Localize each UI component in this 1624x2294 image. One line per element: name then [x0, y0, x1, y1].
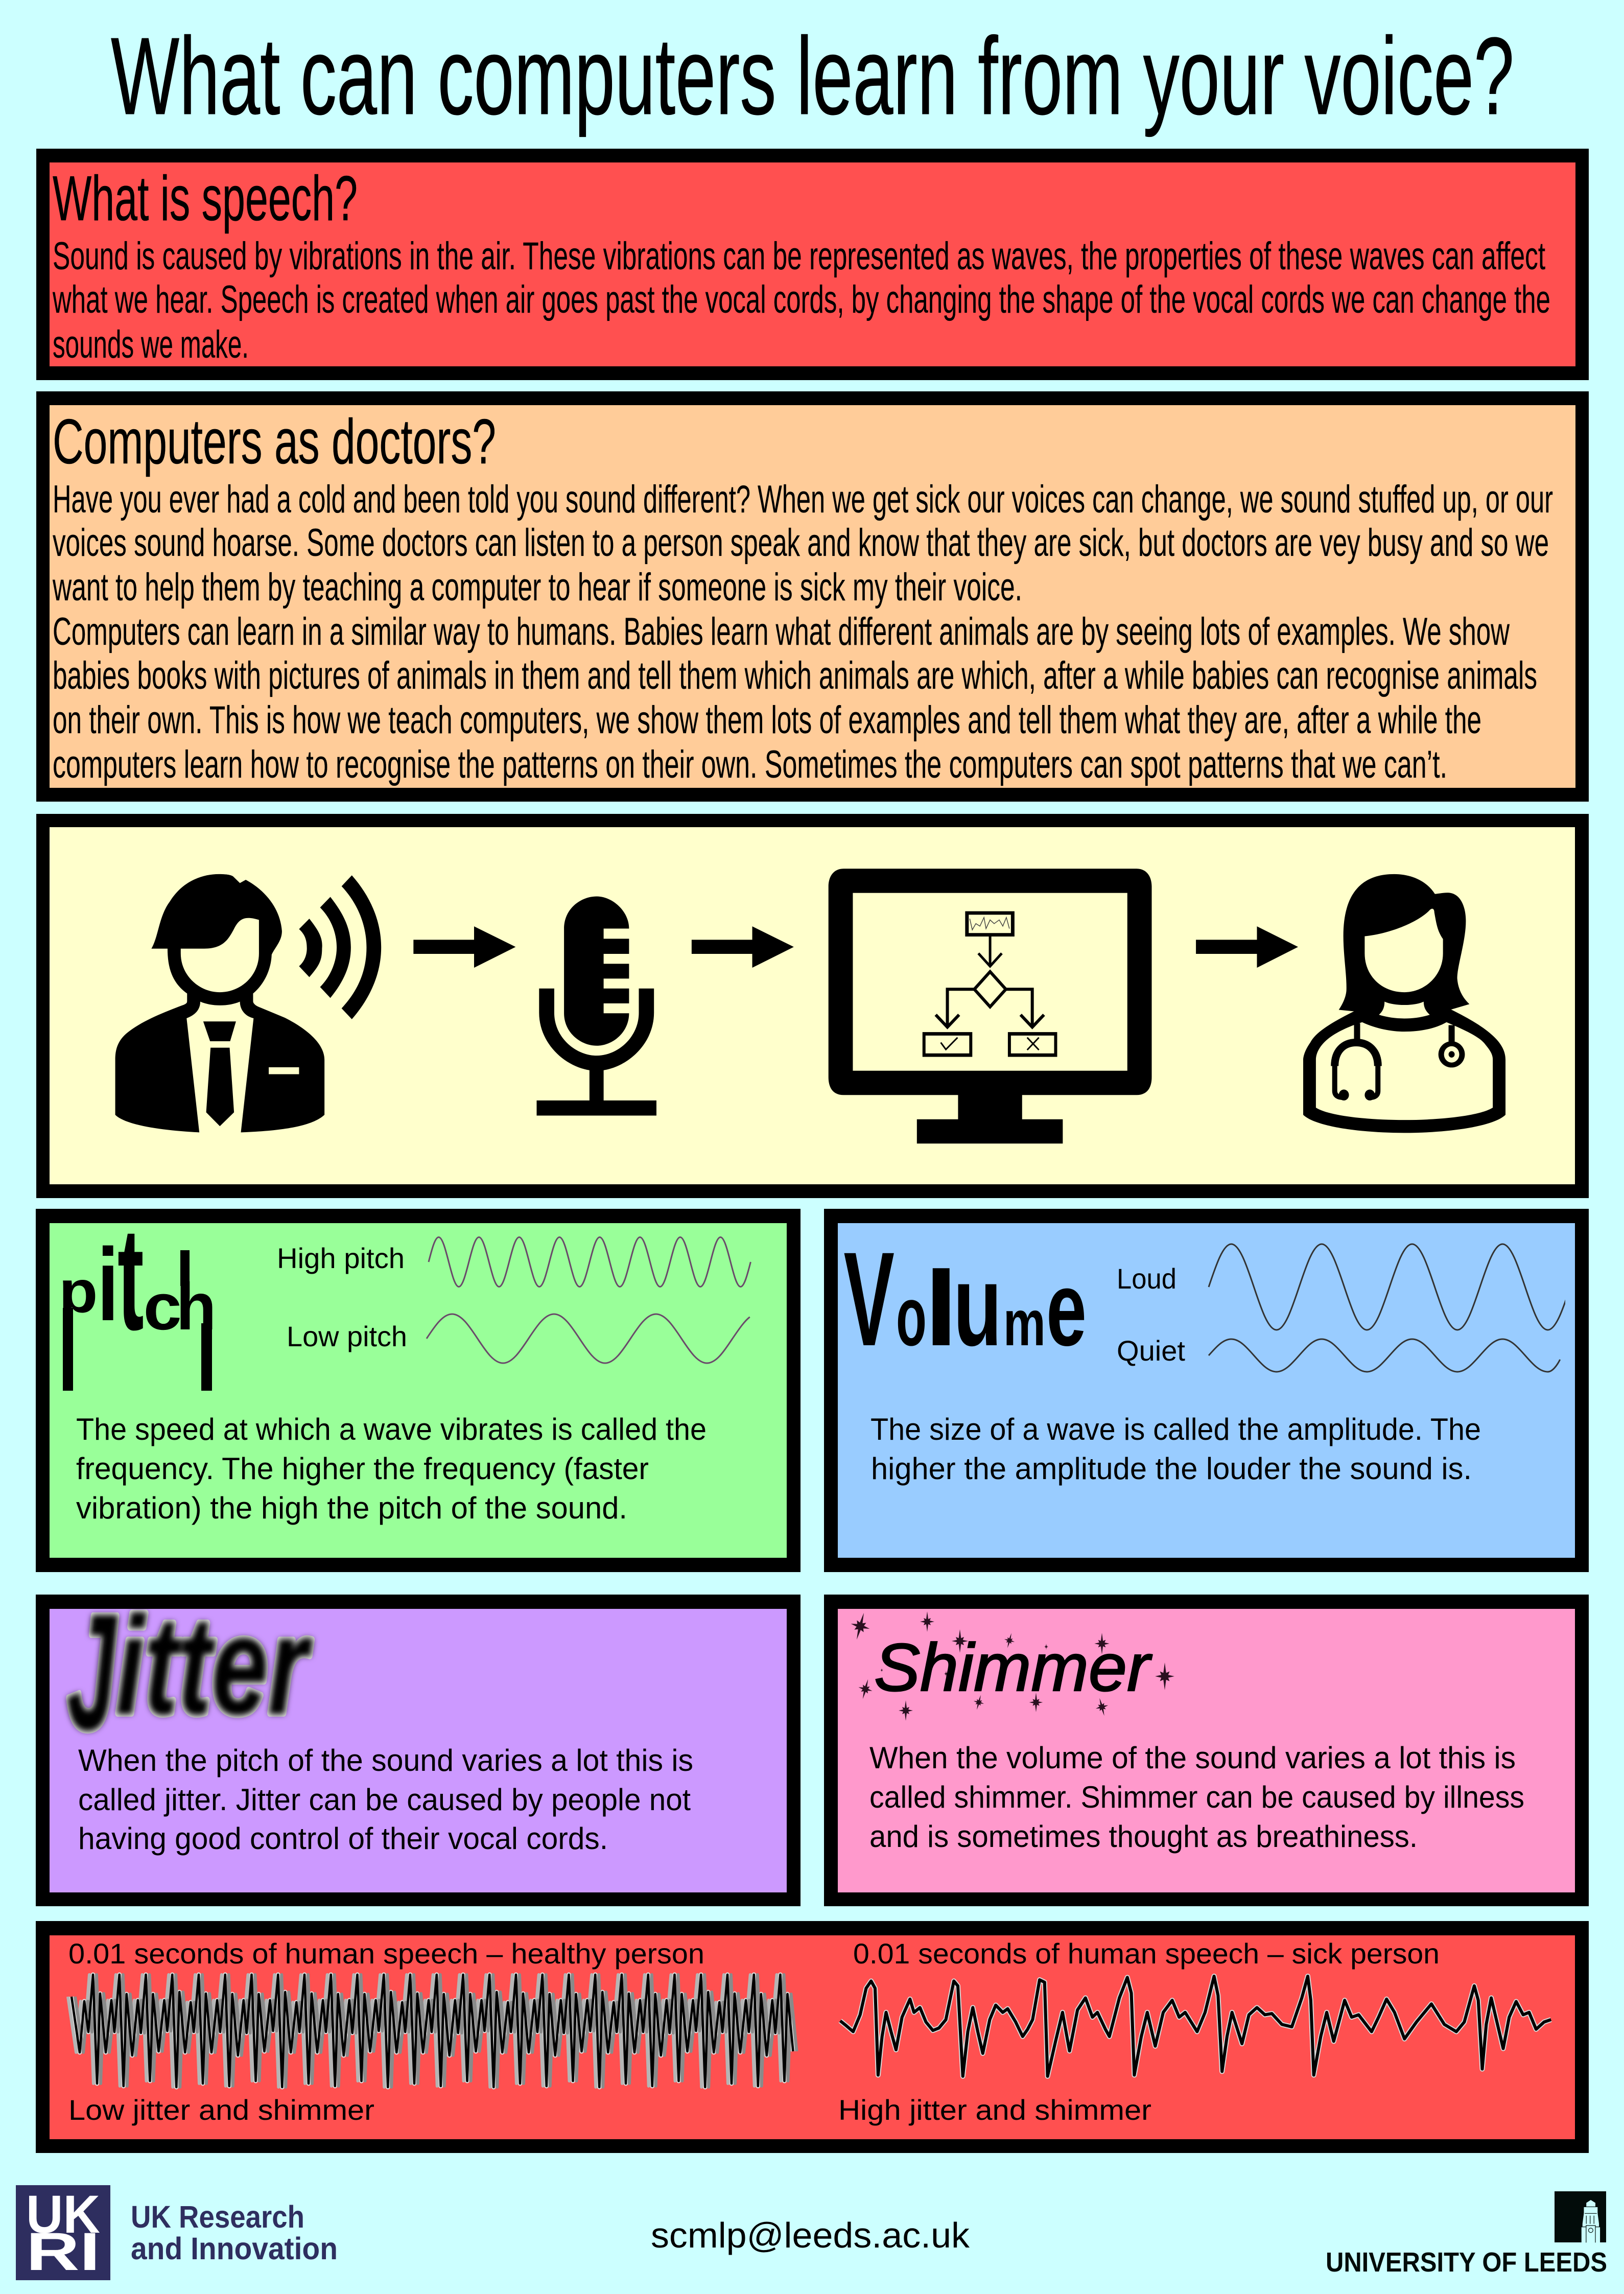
heading: pitch word art [59, 1197, 216, 1391]
text block: shimmer body: called shimmer. Shimmer can be caused by illness [869, 1780, 1524, 1814]
text block: jitter body: having good control of their vocal cords. [78, 1821, 608, 1856]
heading: pitch word art: h [176, 1270, 216, 1344]
text block: what is speech body: sounds we make. [53, 323, 249, 366]
label: quiet: Quiet [1117, 1335, 1185, 1367]
heading: volume word art: V [844, 1225, 895, 1374]
text block: shimmer body [869, 1741, 1524, 1854]
text block: volume body [870, 1412, 1481, 1486]
arrow: computer to doctor [1196, 926, 1298, 968]
heading: volume word art: u [953, 1241, 1002, 1370]
icon: computer monitor with decision flowchart [829, 869, 1152, 1143]
contact email: scmlp@leeds.ac.uk [651, 2215, 970, 2255]
heading: shimmer word art: Shimmer [874, 1630, 1152, 1705]
text block: computers as doctors body [52, 478, 1553, 786]
panel: computers as doctors [36, 391, 1589, 802]
logo: UK Research and Innovation: UK [26, 2185, 100, 2244]
logo: UK Research and Innovation [16, 2185, 338, 2282]
heading: jitter blurred word art [67, 1580, 313, 1763]
arrow: man to microphone [413, 926, 515, 968]
heading: jitter blurred word art: itter [116, 1589, 313, 1743]
chart: sick speech waveform [840, 1976, 1551, 2076]
text block: jitter body: When the pitch of the sound varies a lot this is [78, 1743, 693, 1777]
panel: volume [824, 1209, 1589, 1572]
arrow: microphone to computer [692, 926, 794, 968]
label: low jitter and shimmer: Low jitter and shimmer [68, 2094, 374, 2126]
chart: low pitch wave [427, 1314, 750, 1363]
text block: shimmer body: and is sometimes thought as breathiness. [869, 1819, 1418, 1854]
panel: what is speech [36, 149, 1589, 380]
logo: UK Research and Innovation: and Innovation [131, 2231, 338, 2266]
icon: doctor with stethoscope [1303, 874, 1505, 1133]
label: high pitch: High pitch [277, 1242, 405, 1274]
heading: volume word art: l [924, 1249, 958, 1368]
heading: pitch word art: i [97, 1227, 119, 1342]
label: healthy person heading: 0.01 seconds of human speech – healthy person [68, 1937, 704, 1970]
heading: jitter blurred word art: J [67, 1580, 118, 1763]
heading: what is speech: What is speech? [53, 163, 358, 234]
icon: sparkle stars [848, 1610, 1174, 1721]
panel: jitter [36, 1580, 801, 1906]
heading: volume word art: m [1003, 1288, 1046, 1359]
panel: speech waveforms comparison [36, 1921, 1589, 2153]
logo: UK Research and Innovation: UK Research [131, 2199, 304, 2234]
heading: pitch word art: p [59, 1258, 98, 1325]
text block: volume body: higher the amplitude the louder the sound is. [871, 1452, 1472, 1486]
text block: pitch body: vibration) the high the pitch of the sound. [76, 1491, 627, 1525]
label: high jitter and shimmer: High jitter and shimmer [838, 2094, 1151, 2126]
text block: jitter body: called jitter. Jitter can be caused by people not [78, 1783, 691, 1817]
heading: pitch word art: c [144, 1270, 182, 1343]
heading: computers as doctors: Computers as doctors? [53, 407, 496, 477]
heading: pitch word art: t [117, 1197, 144, 1361]
text block: pitch body [76, 1412, 707, 1525]
panel: pitch [36, 1197, 801, 1572]
heading: volume word art: o [896, 1269, 927, 1363]
logo: University of Leeds [1326, 2191, 1607, 2278]
heading: jitter blurred word art: J [67, 1580, 118, 1763]
heading: volume word art: e [1046, 1249, 1087, 1368]
heading: jitter blurred word art: itter [116, 1589, 313, 1743]
heading: volume word art [844, 1225, 1087, 1374]
icon: man speaking [115, 874, 381, 1132]
text block: jitter body [78, 1743, 693, 1856]
label: loud: Loud [1117, 1262, 1176, 1295]
text block: what is speech body [52, 235, 1550, 366]
text block: pitch body: frequency. The higher the frequency (faster [76, 1452, 649, 1486]
text block: shimmer body: When the volume of the sound varies a lot this is [869, 1741, 1516, 1775]
chart: quiet wave [1209, 1339, 1560, 1372]
icon: microphone [536, 896, 656, 1115]
label: sick person heading: 0.01 seconds of human speech – sick person [853, 1937, 1440, 1970]
logo: UK Research and Innovation: RI [26, 2222, 100, 2282]
text block: volume body: The size of a wave is called the amplitude. The [870, 1412, 1481, 1446]
panel: voice to doctor pipeline [36, 814, 1589, 1198]
chart: healthy speech waveform [68, 1975, 797, 2087]
chart: high pitch wave [429, 1237, 750, 1286]
label: low pitch: Low pitch [287, 1320, 407, 1352]
text block: pitch body: The speed at which a wave vibrates is called the [76, 1412, 707, 1446]
panel: shimmer [824, 1595, 1589, 1906]
text block: computers as doctors body: want to help them by teaching a computer to hear if someone is sick my their voice. [52, 566, 1022, 609]
chart: loud wave [1209, 1244, 1570, 1330]
